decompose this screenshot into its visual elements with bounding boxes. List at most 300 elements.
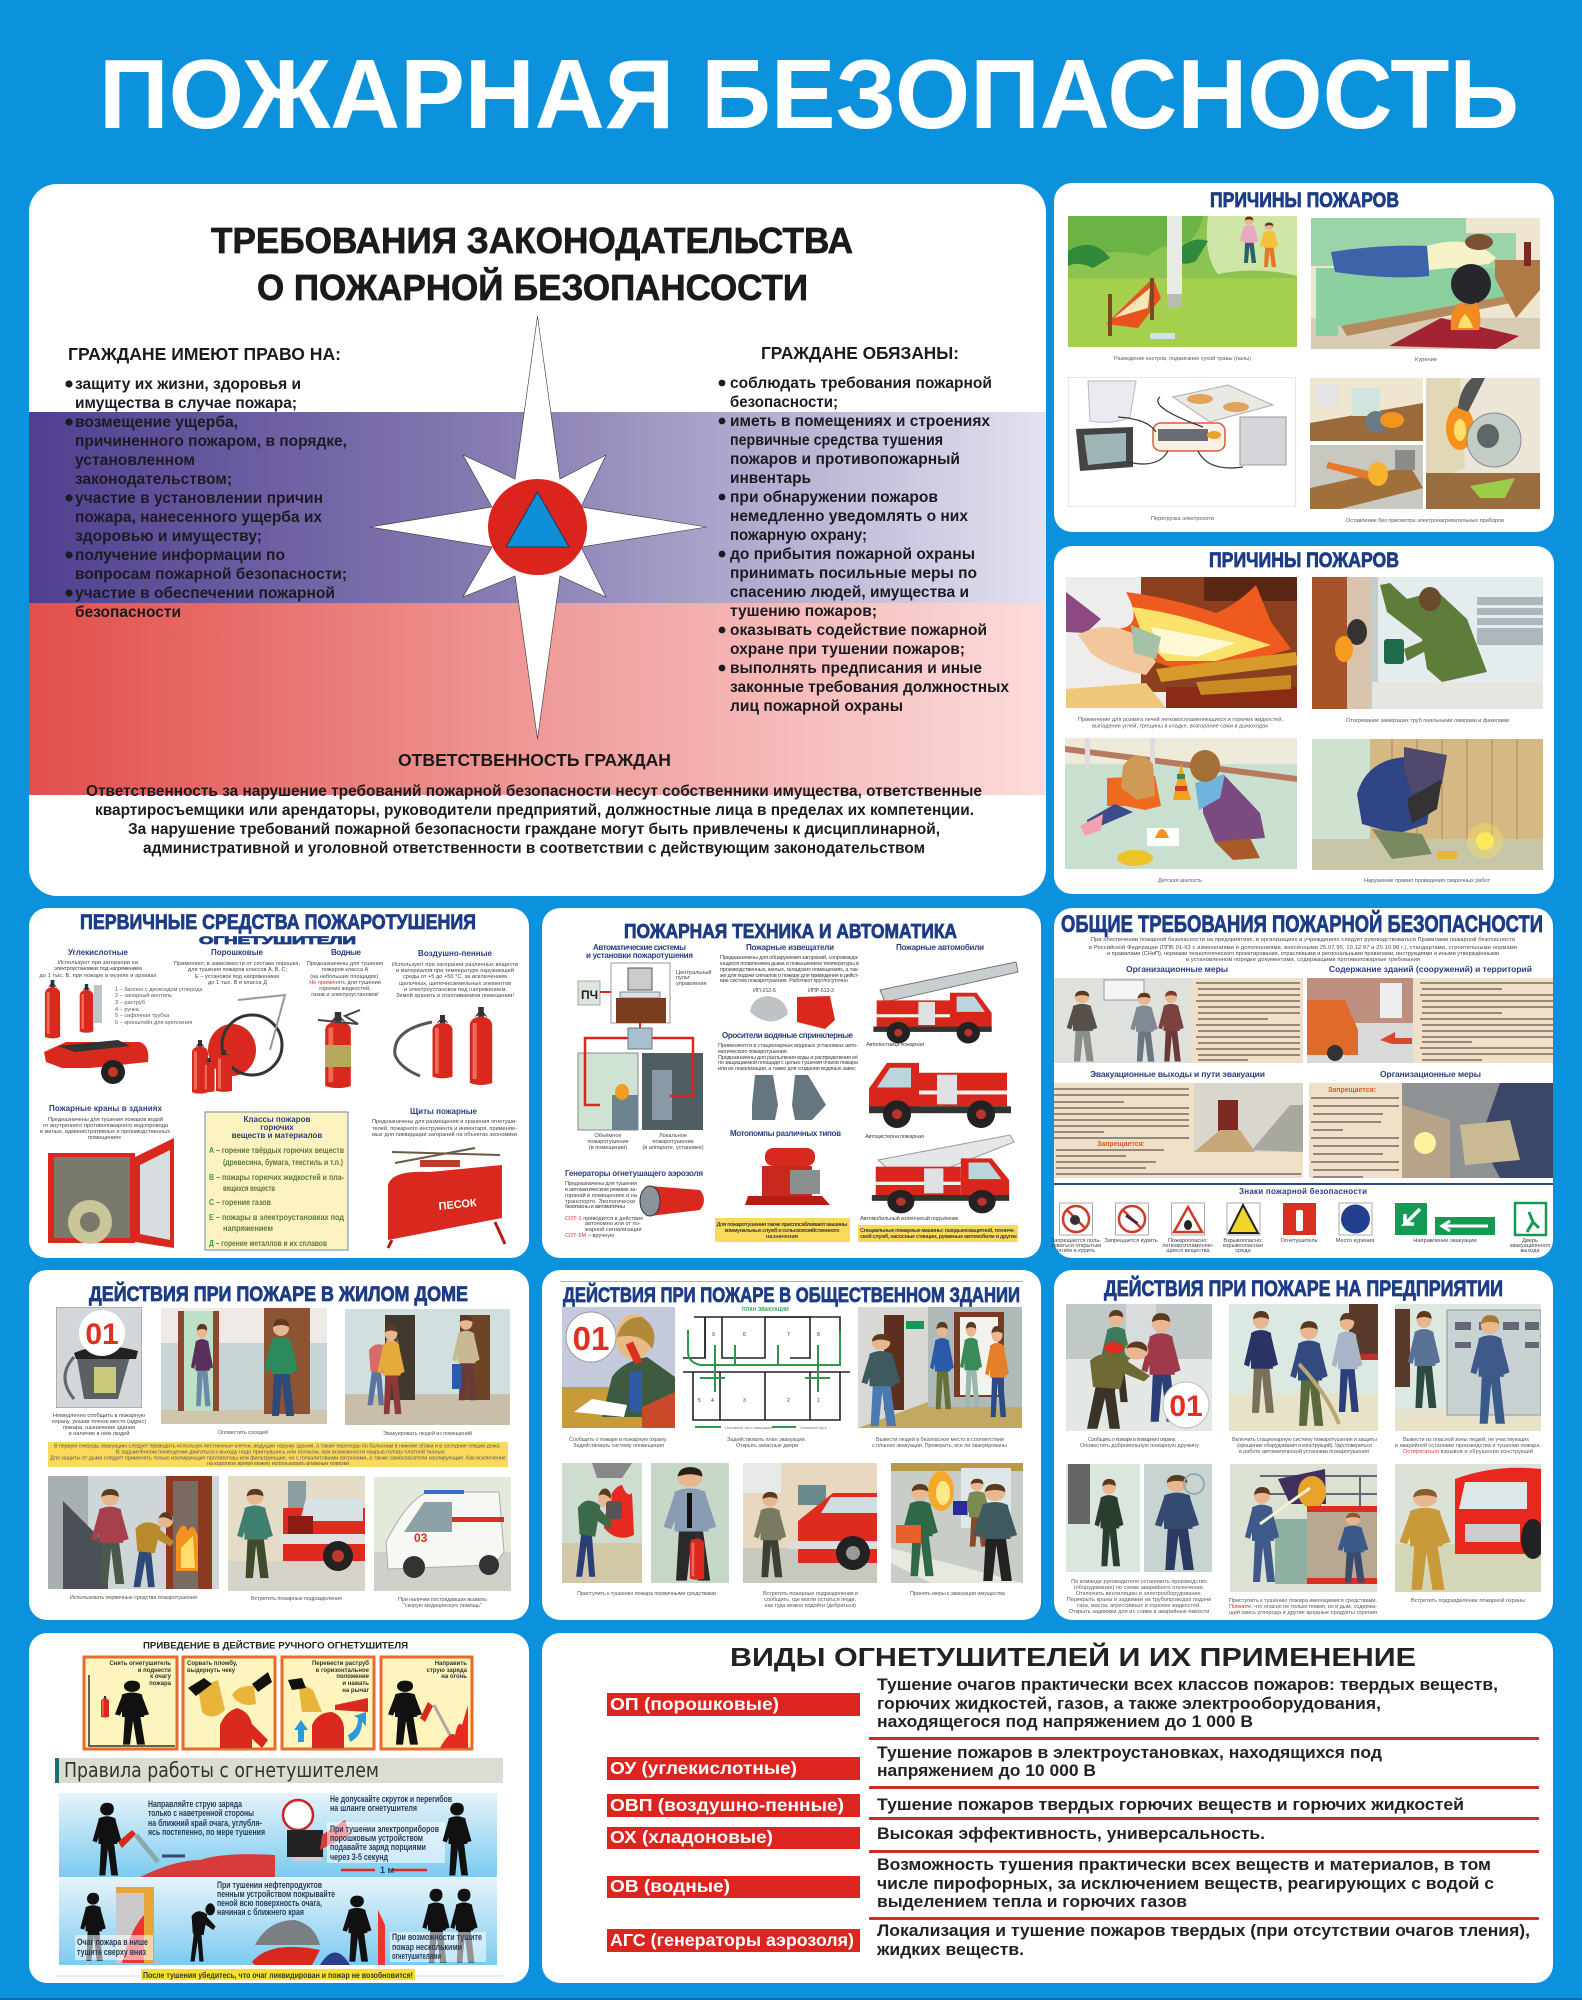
illustration: welding near wooden wall <box>1312 739 1543 870</box>
caption: Вывести людей в безопасное место в соответствии <box>876 1436 1004 1443</box>
text block: citizens' duties: безопасности; <box>730 394 838 411</box>
text block: citizens' duties: выполнять предписания и иные <box>730 660 982 677</box>
section: fire safety signs <box>1051 1187 1550 1254</box>
column: detectors: вие систем пожаротушения. Работают круглосуточно <box>720 978 848 984</box>
column: fire hydrants in buildings: Предназначены для тушения пожаров водой <box>48 1116 163 1123</box>
intro text: в установленном порядке документами, содержащими противопожарные требования <box>1186 957 1420 963</box>
section: organizational measures: Организационные меры <box>1126 964 1228 974</box>
heading: ПРИЧИНЫ ПОЖАРОВ <box>1209 549 1399 572</box>
caption <box>52 1413 146 1437</box>
step 1: и поднести <box>138 1668 171 1674</box>
caption <box>1229 1598 1377 1616</box>
heading: ПРИЧИНЫ ПОЖАРОВ <box>1210 189 1399 212</box>
section: fire safety signs: Взрывоопасно: <box>1223 1238 1263 1244</box>
panel: fire equipment and automation <box>542 908 1041 1258</box>
note: yellow notes: Специальные пожарные машины: газодымозащитной, техниче- <box>860 1227 1015 1234</box>
illustration: report fire, enterprise: 01 <box>1169 1390 1203 1423</box>
box: fire classes: горючих <box>260 1123 294 1132</box>
flag band: blue <box>29 412 1046 603</box>
section: organizational measures (prohibitions) <box>1309 1069 1553 1178</box>
column: carbon dioxide: 4 – ручка <box>115 1007 140 1013</box>
column: air-foam: и электроустановок под напряжением. <box>404 987 507 993</box>
column: automatic systems: и установки пожаротушения <box>586 951 693 960</box>
step 4: струю заряда <box>427 1668 468 1674</box>
heading: ВИДЫ ОГНЕТУШИТЕЛЕЙ И ИХ ПРИМЕНЕНИЕ <box>730 1642 1416 1672</box>
illustration: fighting fire, left <box>562 1463 642 1583</box>
note: yellow notes: Для пожаротушения также приспосабливают машины <box>716 1221 848 1228</box>
column: automatic systems: ПЧ <box>581 988 598 1002</box>
illustration: lead people out <box>858 1307 1022 1428</box>
column: fire trucks: Автомобильный коленчатый подъёмник <box>860 1215 959 1222</box>
step 2: Сорвать пломбу, <box>187 1660 238 1667</box>
column: aerosol generators: транспорте. Экологически <box>565 1199 635 1205</box>
step 3: на рычаг <box>342 1688 369 1694</box>
caption: Курение <box>1415 357 1437 363</box>
panel heading <box>211 220 853 308</box>
column: sprinklers: Предназначены для распыления воды и распределения её <box>718 1055 858 1061</box>
column: sprinklers: или их локализации, а также для создания водяных завес <box>718 1066 856 1072</box>
row: carbon dioxide: напряжением до 10 000 В <box>877 1762 1096 1780</box>
column: detectors: ющихся появлением дыма и повышением температуры в <box>720 961 859 967</box>
note: yellow notes: коммунальных служб и сельскохозяйственного <box>724 1227 840 1234</box>
caption: Применение для розжига печей легковоспламеняющихся и горючих жидкостей, <box>1078 716 1283 723</box>
illustration: use primary firefighting means <box>48 1476 219 1589</box>
column: automatic systems: Центральный <box>676 969 712 976</box>
row: carbon dioxide: Тушение пожаров в электроустановках, находящихся под <box>877 1744 1383 1762</box>
diagram: rules, upper row: подавайте заряд порциями <box>330 1842 426 1852</box>
column: fire trucks <box>860 943 1018 1222</box>
panel: causes of fires 1 <box>1054 183 1554 532</box>
panel: types of extinguishers <box>542 1633 1553 1983</box>
caption: Задействовать план эвакуации. <box>727 1436 806 1443</box>
caption: Задействовать систему оповещения <box>573 1442 664 1449</box>
illustration: evacuation plan <box>683 1307 850 1430</box>
row: water: Возможность тушения практически всех веществ и материалов, в том <box>877 1856 1491 1874</box>
column: carbon dioxide: 5 – сифонная трубка <box>115 1013 170 1019</box>
note: yellow warning strip <box>48 1442 508 1467</box>
column: carbon dioxide: до 1 тыс. В, при пожаре в музеях и архивах <box>40 973 157 979</box>
text block: citizens' rights: безопасности <box>75 604 181 621</box>
caption <box>1080 1437 1199 1449</box>
section: organizational measures (prohibitions): Запрещается: <box>1328 1087 1376 1094</box>
diagram: rules, upper row: через 3-5 секунд <box>330 1852 388 1862</box>
caption <box>727 1436 806 1449</box>
caption: газа, масла, агрессивных и горючих жидкостей. <box>1077 1602 1201 1609</box>
text block: citizens' rights: причиненного пожаром, в порядке, <box>75 433 347 450</box>
panel heading: О ПОЖАРНОЙ БЕЗОПАНСОСТИ <box>257 266 808 308</box>
caption: Немедленно сообщить в пожарную <box>53 1413 145 1419</box>
text block: citizens' duties <box>719 343 1009 715</box>
caption: с планом эвакуации. Проверить, все ли эвакуированы <box>872 1443 1007 1449</box>
box: fire classes: Е – пожары в электроустановках под <box>209 1213 344 1222</box>
illustration: evacuation plan: 3 <box>743 1398 746 1404</box>
column: water: пожаров класса А <box>322 967 369 973</box>
illustration: telephone 01: 01 <box>85 1318 119 1351</box>
column: aerosol generators: гораний в помещениях и на <box>565 1192 638 1199</box>
text block: citizens' rights: участие в установлении причин <box>75 490 323 507</box>
text block: citizens' responsibility <box>86 750 982 857</box>
column: carbon dioxide: 3 – раструб <box>115 1000 145 1006</box>
text block: citizens' responsibility: квартиросъемщики или арендаторы, руководители предприятий, должностные лица в пределах их компетенции. <box>95 802 974 819</box>
section: fire safety signs: легковоспламеняю- <box>1162 1243 1214 1249</box>
caption: Открыть запасные двери <box>736 1443 798 1449</box>
diagram: rules, upper row: Направляйте струю заряда <box>148 1799 243 1809</box>
column: fire trucks: Пожарные автомобили <box>896 943 984 952</box>
panel: legislation requirements <box>29 184 1046 896</box>
box: fire classes: Д – горение металлов и их сплавов <box>209 1239 327 1248</box>
text block: citizens' rights: здоровью и имуществу; <box>75 528 262 545</box>
main title: ПОЖАРНАЯ БЕЗОПАСНОСТЬ <box>99 39 1519 149</box>
section: evacuation exits: Запрещается: <box>1097 1141 1145 1148</box>
column: fire shields: телей, пожарного инструмента и инвентаря, применяе- <box>372 1125 517 1132</box>
column: air-foam: Используют при загорании различных веществ <box>392 962 518 968</box>
caption: Сообщить о пожаре в пожарную охрану. <box>1088 1437 1176 1443</box>
row: halon: ОХ (хладоновые) <box>610 1827 773 1847</box>
text block: citizens' duties: иметь в помещениях и строениях <box>730 413 990 430</box>
row: water <box>607 1856 1539 1920</box>
caption: (оборудование) по схеме аварийного отключения. <box>1074 1584 1205 1591</box>
column: aerosol generators: Генераторы огнетушащего аэрозоля <box>565 1169 703 1178</box>
column: sprinklers: по защищаемой площади с целью тушения очагов пожара <box>718 1059 859 1066</box>
column: water: горючих жидкостей, <box>319 985 371 992</box>
column: fire hydrants in buildings: Пожарные краны в зданиях <box>49 1104 163 1113</box>
illustration: smoking on sofa <box>1311 218 1540 349</box>
illustration: telephone 01 <box>56 1307 142 1408</box>
caption: Принять меры к эвакуации имущества <box>910 1591 1006 1597</box>
diagram: rules, upper row: Не допускайте скруток и перегибов <box>330 1794 452 1804</box>
column: sprinklers: Применяются в стационарных водяных установках авто- <box>718 1043 858 1049</box>
illustration: thawing pipes with blowtorch <box>1312 577 1543 709</box>
illustration: evacuation plan: 7 <box>787 1332 790 1338</box>
section: organizational measures <box>1054 964 1303 1063</box>
text block: citizens' rights: установленном <box>75 452 195 469</box>
caption: в аварийной остановке производства и тушении пожара. <box>1395 1442 1541 1449</box>
column: carbon dioxide: 6 – кронштейн для крепления <box>115 1019 192 1026</box>
caption <box>569 1437 667 1449</box>
panel: extinguisher use instructions <box>29 1633 529 1983</box>
box: fire classes: В – пожары горючих жидкостей и пла- <box>209 1173 344 1182</box>
illustration: fighting fire, right <box>651 1463 729 1583</box>
intro text: и правилами (СНиП), нормами технологического проектирования, отраслевыми и региональными правилами, инструкциями и иными утверждёнными <box>1107 951 1499 957</box>
text block: citizens' rights: вопросам пожарной безопасности; <box>75 566 347 583</box>
column: fire shields: мых для ликвидации загораний на объектах экономики <box>372 1131 517 1138</box>
caption: Встретить пожарные подразделения и <box>763 1591 858 1597</box>
caption <box>1395 1436 1541 1455</box>
column: detectors: Пожарные извещатели <box>746 943 834 952</box>
box: fire classes: напряжением <box>223 1224 273 1233</box>
panel: actions in public building <box>542 1270 1041 1620</box>
text block: citizens' responsibility: Ответственность за нарушение требований пожарной безопасности несут собственники имущества, ответственные <box>86 783 982 800</box>
text block: citizens' rights: имущества в случае пожара; <box>75 395 297 412</box>
box: fire classes: (древесина, бумага, текстиль и т.п.) <box>223 1158 343 1167</box>
column: fire shields: ПЕСОК <box>438 1197 478 1213</box>
heading: ПОЖАРНАЯ ТЕХНИКА И АВТОМАТИКА <box>624 921 957 943</box>
diagram: rules, lower row: тушите сверху вниз <box>77 1947 146 1957</box>
illustration: evacuate property <box>891 1463 1023 1583</box>
row: air-foam <box>607 1794 1539 1820</box>
section: fire safety signs: огнём и курить <box>1057 1248 1095 1254</box>
column: automatic systems: (в аппарате, установке) <box>642 1145 704 1151</box>
illustration: meet fire engine <box>228 1476 365 1591</box>
section: fire safety signs: Запрещается поль- <box>1051 1238 1101 1244</box>
section: building maintenance <box>1307 964 1553 1063</box>
caption: Сообщить о пожаре в пожарную охрану. <box>569 1437 667 1443</box>
box: fire classes <box>205 1112 348 1250</box>
text block: citizens' duties: инвентарь <box>730 470 811 487</box>
text block: citizens' duties: законные требования должностных <box>730 679 1009 696</box>
panel heading: ТРЕБОВАНИЯ ЗАКОНОДАТЕЛЬСТВА <box>211 220 853 261</box>
illustration: evacuation plan: Основной путь эвакуации <box>725 1425 773 1430</box>
note: yellow notes <box>715 1218 1018 1242</box>
caption: пожара, назначение здания <box>63 1425 135 1431</box>
diagram: rules, lower row: Очаг пожара в нише <box>77 1937 148 1947</box>
row: powder: Тушение очагов практически всех классов пожаров: твердых веществ, <box>877 1676 1498 1694</box>
text block: citizens' responsibility: административной и уголовной ответственности в соответствии с действующим законодательством <box>143 840 925 857</box>
panel: causes of fires 2 <box>1054 546 1554 894</box>
step 3: положение <box>336 1674 370 1680</box>
text block: citizens' duties: пожаров и противопожарный <box>730 451 960 468</box>
caption: Приступить к тушению пожара первичными средствами <box>577 1591 716 1597</box>
caption: Открыть задвижки для их слива в аварийные ёмкости <box>1069 1608 1209 1615</box>
column: powder <box>174 948 300 1094</box>
diagram: rules, lower row: При возможности тушите <box>392 1932 482 1942</box>
column: aerosol generators <box>565 1169 704 1239</box>
illustration: evacuate people <box>345 1309 510 1425</box>
caption: Нарушение правил проведения сварочных работ <box>1364 878 1490 884</box>
caption: Вывести из опасной зоны людей, не участвующих <box>1403 1436 1529 1443</box>
caption <box>398 1597 487 1609</box>
column: automatic systems: управления <box>676 981 707 987</box>
column: automatic systems: Локальное <box>659 1133 687 1139</box>
row: aerosol generators: Локализация и тушение пожаров твердых (при отсутствии очагов тления), <box>877 1922 1530 1940</box>
column: sprinklers: матического пожаротушения. <box>718 1049 788 1055</box>
row: halon: Высокая эффективность, универсальность. <box>877 1825 1265 1843</box>
caption: щий окись углерода и другие вредные продукты горения <box>1229 1609 1377 1616</box>
heading: ДЕЙСТВИЯ ПРИ ПОЖАРЕ НА ПРЕДПРИЯТИИ <box>1104 1276 1503 1301</box>
step 3: Перевести раструб <box>312 1660 369 1667</box>
box: fire classes: С – горение газов <box>209 1198 271 1207</box>
illustration: unattended electric heaters <box>1310 378 1540 509</box>
step 4 <box>381 1657 472 1749</box>
caption: Приступить к тушению пожара имеющимися средствами. <box>1229 1598 1377 1604</box>
note: yellow warning strip: на короткое время можно использовать влажные повязки <box>207 1461 349 1467</box>
illustration: children playing with matches <box>1065 738 1297 869</box>
step 4: Направить <box>435 1661 467 1667</box>
section: fire safety signs: Пожароопасно: <box>1168 1238 1208 1244</box>
caption: "скорую медицинскую помощь" <box>403 1603 482 1609</box>
column: motor pumps: Мотопомпы различных типов <box>730 1129 841 1138</box>
column: aerosol generators: СОТ-1 приводится в действие <box>565 1215 643 1222</box>
diagram: rules, upper row: только с наветренной стороны <box>148 1808 254 1818</box>
column: detectors <box>720 943 859 1029</box>
caption: выпадение углей, трещины в кладке, возгорание сажи в дымоходах <box>1092 722 1268 730</box>
caption: Использовать первичные средства пожаротушения <box>70 1595 197 1601</box>
note: final warning <box>55 1969 503 1980</box>
section: evacuation exits <box>1054 1069 1303 1178</box>
illustration: extinguish with available means <box>1230 1464 1377 1592</box>
section: fire safety signs: взрывоопасная <box>1223 1243 1263 1249</box>
column: automatic systems: пожаротушение <box>587 1139 629 1145</box>
section: fire safety signs: выхода <box>1520 1248 1540 1254</box>
caption: Встретить пожарные подразделения <box>251 1596 342 1602</box>
row: carbon dioxide <box>607 1744 1539 1789</box>
intro text: в Российской Федерации (ППБ 01-93 с изменениями и дополнениями, внесёнными 25.07.95, 10.12.97 и 20.10.98 г.), стандартами, строительными нормами <box>1089 944 1517 951</box>
caption: При наличии пострадавших вызвать <box>398 1597 487 1603</box>
step 3: и нажать <box>342 1681 369 1687</box>
row: air-foam: Тушение пожаров твердых горючих веществ и горючих жидкостей <box>877 1796 1464 1814</box>
caption: Оповестить соседей <box>218 1429 268 1436</box>
caption: и наличие в нём людей <box>69 1430 129 1437</box>
column: detectors: же для подачи сигналов о пожаре для приведения в дейст- <box>720 972 859 979</box>
heading: ДЕЙСТВИЯ ПРИ ПОЖАРЕ В ОБЩЕСТВЕННОМ ЗДАНИИ <box>563 1283 1020 1307</box>
illustration: call fire service <box>562 1307 675 1428</box>
column: aerosol generators: жарной сигнализации <box>585 1226 642 1233</box>
column: sprinklers: Оросители водяные спринклерные <box>722 1031 854 1040</box>
caption: По команде руководителя остановить производство <box>1071 1579 1207 1585</box>
illustration: evacuation plan: 2 <box>787 1398 790 1404</box>
illustration: burning grass <box>1068 216 1297 347</box>
diagram: rules, upper row: При тушении электроприборов <box>330 1824 439 1834</box>
caption: охрану, указав точное место (адрес) <box>52 1419 146 1425</box>
column: automatic systems: (в помещении) <box>589 1145 627 1151</box>
caption: Оповестить добровольную пожарную дружину <box>1080 1443 1199 1449</box>
caption <box>763 1591 858 1609</box>
flag band: red <box>29 603 1046 795</box>
column: air-foam <box>392 949 518 1085</box>
column: air-foam: и материалов при температуре окружающей <box>396 967 514 974</box>
panel: general fire safety requirements <box>1051 908 1553 1258</box>
text block: citizens' rights <box>65 344 347 621</box>
section: fire safety signs: зоваться открытым <box>1051 1243 1101 1249</box>
column: water: Предназначены для тушения <box>307 961 383 967</box>
caption: Оставление без присмотра электронагревательных приборов <box>1346 518 1504 524</box>
section: organizational measures (prohibitions): Организационные меры <box>1380 1069 1481 1079</box>
column: fire hydrants in buildings: в жилых, административных и производственных <box>40 1129 170 1135</box>
caption: Отключить вентиляцию и электрооборудование. <box>1076 1591 1203 1597</box>
illustration: evacuation plan: 1 <box>817 1398 820 1404</box>
caption <box>1078 716 1283 730</box>
column: carbon dioxide: электроустановках под напряжением <box>54 966 142 972</box>
row: powder: находящегося под напряжением до 1 000 В <box>877 1713 1253 1731</box>
diagram: rules, lower row: начиная с ближнего края <box>217 1907 304 1917</box>
column: carbon dioxide: Используют при загорании на <box>58 960 139 966</box>
illustration: evacuation plan: 9 <box>712 1332 715 1338</box>
note: yellow warning strip: В первую очередь эвакуацию следует проводить используя лестничные клетки, ведущие наружу здания, а также переходы по балконам в нижние этажи и в соседние секции дома. <box>54 1444 501 1450</box>
caption: (орошение оборудования и конструкций). Удостовериться <box>1237 1442 1372 1449</box>
diagram: rules, lower row: пожар несколькими <box>392 1942 462 1952</box>
text block: citizens' rights: защиту их жизни, здоровья и <box>75 376 301 393</box>
caption: Разведение костров, поджигание сухой травы (палы) <box>1114 355 1251 362</box>
illustration: report fire, enterprise <box>1066 1304 1212 1431</box>
note: yellow notes: назначения <box>766 1234 798 1240</box>
column: fire hydrants in buildings: помещениях <box>88 1135 121 1141</box>
section: fire safety signs: щиеся вещества <box>1166 1248 1211 1254</box>
step 1: пожара <box>149 1681 172 1687</box>
section: evacuation exits: Эвакуационные выходы и пути эвакуации <box>1090 1069 1265 1079</box>
diagram: rules, lower row: пеной всю поверхность очага, <box>217 1898 322 1908</box>
diagram: rules, lower row: пенным устройством покрывайте <box>217 1889 335 1899</box>
column: automatic systems: пульт <box>676 975 690 981</box>
column: water: газов и электроустановок! <box>311 992 379 998</box>
row: water: числе пирофорных, за исключением веществ, реагирующих с водой с <box>877 1875 1494 1893</box>
illustration: evacuation plan: 5 <box>698 1398 701 1404</box>
caption: в работе автоматической установки пожаротушения <box>1239 1448 1369 1455</box>
column: carbon dioxide: Углекислотные <box>68 948 129 957</box>
column: detectors: производственных, жилых, складских помещениях, а так- <box>720 967 859 973</box>
column: air-foam: щелочных, щелочноземельных элементов <box>399 981 511 987</box>
column: air-foam: Воздушно-пенные <box>418 949 493 958</box>
rule <box>1054 1183 1553 1185</box>
box: fire classes: веществ и материалов <box>232 1131 322 1140</box>
column: air-foam: Зимой хранить в отапливаемом помещении! <box>396 992 514 999</box>
panel: actions in residential building <box>29 1270 529 1620</box>
illustration: call fire service: 01 <box>573 1320 609 1357</box>
heading: ПЕРВИЧНЫЕ СРЕДСТВА ПОЖАРОТУШЕНИЯ <box>80 911 476 934</box>
diagram: rules, lower row: огнетушителями <box>392 1951 441 1961</box>
caption <box>872 1436 1007 1449</box>
section: fire safety signs: Огнетушитель <box>1280 1238 1318 1244</box>
illustration: evacuation plan: Запасной путь <box>800 1425 827 1430</box>
note: yellow warning strip: В задымлённом помещении двигаться к выходу надо пригнувшись или ползком, при возможности накрыв голову плотной тканью. <box>116 1448 446 1456</box>
illustration: lead out people, enterprise <box>1395 1304 1541 1431</box>
diagram: rules, lower row <box>59 1878 497 1965</box>
column: aerosol generators: СОТ-5М – вручную <box>565 1233 614 1239</box>
caption: Перекрыть краны и задвижки на трубопроводах подачи <box>1067 1597 1211 1603</box>
text block: citizens' duties: лиц пожарной охраны <box>730 698 903 715</box>
column: carbon dioxide: 1 – баллон с диоксидом углерода <box>115 987 203 993</box>
text block: citizens' duties: соблюдать требования пожарной <box>730 375 992 392</box>
row: aerosol generators: жидких веществ. <box>876 1941 1024 1959</box>
diagram: rules, upper row: порошковым устройством <box>330 1833 423 1843</box>
illustration: meet fire brigade <box>743 1463 877 1583</box>
column: powder: для тушения пожаров классов А, В, С; <box>188 967 287 973</box>
box: fire classes: А – горение твёрдых горючих веществ <box>209 1146 344 1155</box>
caption: Встретить подразделение пожарной охраны <box>1411 1597 1525 1604</box>
column: fire shields: Предназначены для размещения и хранения огнетуши- <box>372 1119 517 1125</box>
column: water <box>307 948 383 1088</box>
diagram: rules, upper row: ясь постепенно, по мере тушения <box>148 1827 265 1837</box>
step 1: Снять огнетушитель <box>109 1661 171 1667</box>
section: fire safety signs: среда <box>1235 1248 1252 1254</box>
caption: Эвакуировать людей из помещений <box>383 1430 472 1437</box>
column: aerosol generators: в автоматическом режиме за- <box>565 1187 637 1193</box>
caption: Включить стационарную систему пожаротушения и защиты <box>1232 1437 1377 1443</box>
text block: citizens' duties: немедленно уведомлять о них <box>730 508 968 525</box>
step 3: в горизонтальное <box>316 1668 370 1674</box>
row: powder <box>607 1676 1539 1740</box>
text block: citizens' rights: пожара, нанесенного ущерба их <box>75 509 322 526</box>
caption: Перегрузка электросети <box>1151 516 1214 522</box>
caption: как туда можно подойти (добраться) <box>765 1602 856 1609</box>
column: automatic systems <box>578 943 712 1151</box>
column: fire shields <box>372 1107 517 1248</box>
section: fire safety signs: Знаки пожарной безопасности <box>1239 1187 1367 1196</box>
panel: primary firefighting equipment <box>29 908 529 1258</box>
caption: сообщить, где могли остаться люди, <box>764 1597 856 1603</box>
diagram: rules, upper row: на ближний край очага, углубля- <box>148 1818 262 1828</box>
illustration: evacuation plan: 8 <box>817 1332 820 1338</box>
column: powder: до 1 тыс. В и класса Д <box>208 980 267 986</box>
column: fire trucks: Автолестница пожарная <box>866 1042 924 1048</box>
caption: Помните, что опасно не только пламя, но и дым, содержа- <box>1229 1604 1377 1610</box>
section: fire safety signs: Дверь <box>1522 1238 1538 1244</box>
column: detectors: Предназначены для обнаружения загораний, сопровожда- <box>720 954 859 961</box>
diagram: rules, upper row: 1 м <box>380 1865 395 1875</box>
text block: citizens' duties: спасению людей, имущества и <box>730 584 969 601</box>
text block: citizens' rights: возмещение ущерба, <box>75 414 238 431</box>
column: fire shields: Щиты пожарные <box>410 1107 478 1116</box>
section: building maintenance: Содержание зданий (сооружений) и территорий <box>1329 964 1532 974</box>
